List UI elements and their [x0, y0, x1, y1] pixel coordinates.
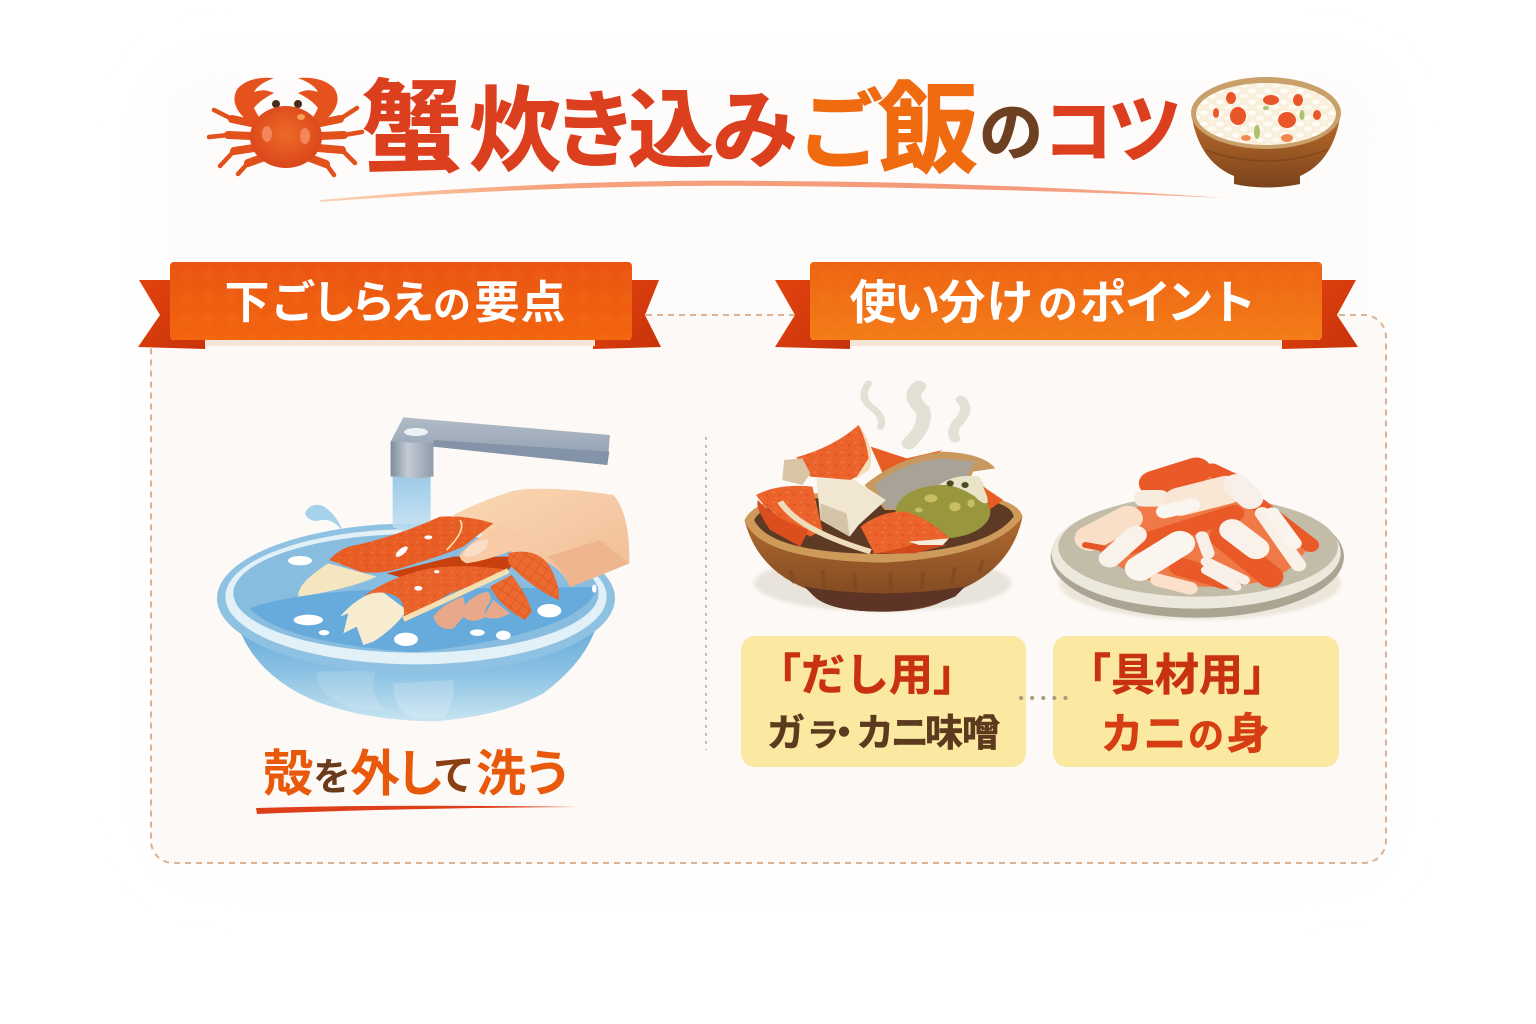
heading text: 使い分けのポイント: の [1038, 283, 1078, 327]
meat pile [1086, 467, 1313, 588]
basin [217, 523, 615, 721]
steam [864, 383, 965, 443]
plate shadow [1059, 547, 1341, 620]
card: dashi use [741, 636, 1026, 767]
title text: コ [1043, 93, 1113, 171]
card text: ガラ・カニ味噌 [767, 713, 1000, 755]
caption: 殻を外して洗う: を [313, 757, 351, 799]
kani miso [896, 485, 990, 538]
card text: カニの身: の [1188, 715, 1224, 756]
illustration: crab meat plate [1051, 467, 1344, 620]
card text: カニの身: ニ [1144, 711, 1186, 759]
heading text: 使い分けのポイント: ン [1166, 276, 1214, 329]
caption: 殻を外して洗う: う [523, 746, 573, 802]
title text: 飯 [878, 75, 978, 187]
carapace piece [865, 452, 995, 510]
illustration: washing crab leg in basin [217, 417, 629, 721]
faucet [391, 417, 610, 479]
crab leg meat [298, 563, 377, 597]
tail fan pieces [508, 552, 559, 600]
card: ingredient use [1053, 636, 1339, 767]
hand back [453, 489, 629, 587]
card text: ガラ・カニ味噌: ・ [825, 713, 863, 755]
thumb [460, 525, 533, 563]
title text: ツ [1108, 89, 1182, 172]
heading text: 使い分けのポイント: い [894, 276, 940, 329]
card text: カニの身: カ [1100, 711, 1144, 759]
card heading: 「具材用」: 「具材用」 [1067, 651, 1287, 700]
title text: の [979, 97, 1043, 169]
heading text: 使い分けのポイント: 分 [938, 276, 986, 329]
title text: 込 [628, 83, 714, 179]
caption: 殻を外して洗う: 殻 [263, 746, 313, 802]
white shell [816, 478, 886, 537]
heading text: 使い分けのポイント: イ [1124, 276, 1172, 329]
card text: ガラ・カニ味噌: 味 [925, 713, 963, 755]
heading text: 下ごしらえの要点: 点 [520, 277, 566, 328]
card text: ガラ・カニ味噌: ラ [807, 717, 839, 753]
caption: 殻を外して洗う: し [395, 746, 445, 802]
icon: rice bowl [1191, 77, 1341, 188]
heading text: 下ごしらえの要点: し [311, 277, 357, 328]
caption underline [256, 806, 578, 814]
caption: 殻を外して洗う: 洗 [476, 746, 526, 802]
card text: カニの身: 身 [1226, 711, 1270, 759]
title text: ご [797, 84, 883, 180]
icon: crab [209, 78, 362, 175]
card text: ガラ・カニ味噌: ニ [891, 713, 929, 755]
heading text: 使い分けのポイント: 使 [850, 276, 896, 329]
dark under shell [387, 557, 520, 587]
heading text: 使い分けのポイント [850, 276, 1256, 329]
crab leg shell [329, 516, 493, 573]
ribbon: right heading [775, 262, 1358, 349]
caption: 殻を外して洗う [263, 746, 573, 802]
heading text: 下ごしらえの要点: 下 [224, 277, 270, 328]
illustration: crab shells bowl [744, 383, 1023, 612]
heading text: 下ごしらえの要点: ら [350, 277, 396, 328]
ribbon: left heading [138, 262, 661, 349]
shadow [754, 555, 1011, 612]
title text [362, 73, 1182, 187]
heading text: 下ごしらえの要点: え [389, 277, 435, 328]
heading text: 使い分けのポイント: け [986, 276, 1034, 329]
card text: ガラ・カニ味噌: 噌 [962, 713, 1000, 755]
caption: 殻を外して洗う: て [433, 752, 475, 799]
bowl body [744, 517, 1023, 612]
card text: ガラ・カニ味噌: ガ [767, 713, 805, 755]
water stream [393, 477, 431, 537]
title text: 炊 [469, 81, 561, 183]
shell pieces [756, 425, 1003, 554]
splash [305, 505, 343, 532]
title text: き [553, 84, 637, 178]
caption: 殻を外して洗う: 外 [350, 746, 400, 802]
heading text: 下ごしらえの要点: ご [270, 277, 316, 328]
lower fingers [433, 592, 510, 629]
plate [1051, 496, 1344, 618]
heading text: 使い分けのポイント: ト [1210, 276, 1256, 329]
heading text: 下ごしらえの要点: の [433, 285, 471, 327]
title text: み [712, 83, 798, 179]
heading text: 下ごしらえの要点 [224, 277, 566, 328]
panel divider [705, 437, 707, 750]
heading text: 下ごしらえの要点: 要 [474, 277, 520, 328]
panel: tips frame [151, 315, 1386, 863]
card heading: 「だし用」: 「だし用」 [757, 651, 977, 700]
card text: ガラ・カニ味噌: カ [856, 713, 894, 755]
title underline [320, 181, 1225, 202]
heading text: 使い分けのポイント: ポ [1080, 276, 1126, 329]
title block [209, 73, 1341, 202]
connector dots [1021, 696, 1066, 700]
claw [861, 512, 949, 554]
card text: カニの身 [1100, 711, 1270, 759]
title text: 蟹 [362, 73, 462, 185]
